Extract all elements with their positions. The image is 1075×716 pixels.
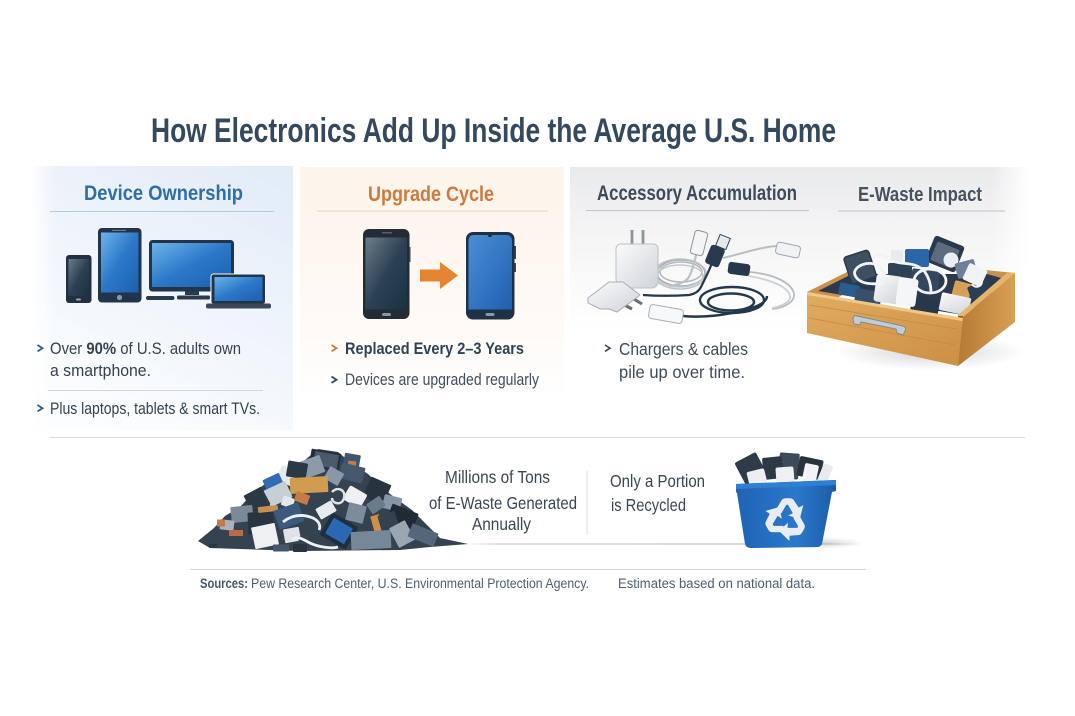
panel: upgrade cycle bbox=[300, 167, 564, 400]
text: millions of tons: Annually bbox=[472, 514, 531, 534]
text: replacement cycle: Replaced Every 2–3 Years bbox=[345, 339, 524, 358]
title: How Electronics Add Up Inside the Average U.S. Home bbox=[151, 112, 836, 150]
text: only a portion recycled: is Recycled bbox=[611, 495, 686, 515]
icon: upgrade arrow bbox=[420, 262, 458, 289]
bin contents bbox=[734, 452, 833, 488]
illustration: e-waste pile bbox=[198, 449, 468, 552]
icon: flat charger bbox=[588, 282, 642, 312]
icon: recycling bin bbox=[734, 452, 864, 549]
icon: small phone bbox=[66, 255, 92, 303]
heading: upgrade cycle: Upgrade Cycle bbox=[368, 183, 494, 206]
drawer front bbox=[807, 292, 963, 366]
text: regular upgrades: Devices are upgraded regularly bbox=[345, 371, 540, 389]
text: only a portion recycled bbox=[610, 471, 705, 515]
text: other devices: Plus laptops, tablets & smart TVs. bbox=[50, 399, 260, 418]
text: only a portion recycled: Only a Portion bbox=[610, 471, 705, 491]
icon: monitor bbox=[146, 240, 234, 300]
text: sources bbox=[200, 576, 815, 591]
icon: usb connectors bbox=[648, 230, 801, 324]
text: millions of tons: Millions of Tons bbox=[445, 467, 550, 487]
bottom ground line bbox=[460, 543, 860, 545]
text: chargers pile up bbox=[605, 339, 748, 382]
recycling symbol bbox=[759, 498, 810, 544]
panel: accessories and e-waste bbox=[570, 167, 1030, 400]
heading: e-waste impact: E-Waste Impact bbox=[858, 184, 982, 206]
drawer right side bbox=[958, 273, 1015, 366]
text: sources: Estimates based on national data. bbox=[618, 576, 815, 591]
icon: new phone bbox=[466, 232, 516, 320]
icon: tablet bbox=[98, 228, 142, 302]
icon: chargers and cables bbox=[588, 230, 801, 324]
text: millions of tons: of E-Waste Generated bbox=[429, 493, 577, 513]
text: millions of tons bbox=[429, 467, 577, 534]
text: smartphone stat: Over 90% of U.S. adults own bbox=[50, 339, 241, 358]
heading: device ownership: Device Ownership bbox=[84, 182, 243, 205]
icon: old phone bbox=[363, 229, 410, 319]
drawer contents bbox=[838, 235, 995, 316]
icon: drawer full of electronics bbox=[807, 235, 1025, 370]
icon: charger cube bbox=[616, 230, 658, 288]
heading: accessory accumulation: Accessory Accumulation bbox=[597, 182, 797, 205]
drawer handle bbox=[853, 316, 906, 335]
text: chargers pile up: Chargers & cables bbox=[619, 339, 748, 359]
text: smartphone stat bbox=[38, 339, 241, 380]
text: chargers pile up: pile up over time. bbox=[619, 362, 745, 382]
drawer interior bbox=[818, 274, 1005, 315]
text: sources: Pew Research Center, U.S. Environmental Protection Agency. bbox=[251, 576, 589, 591]
text: smartphone stat: a smartphone. bbox=[50, 361, 151, 380]
text: sources: Sources: bbox=[200, 576, 248, 591]
icon: devices bbox=[66, 228, 271, 308]
panel: device ownership bbox=[30, 166, 293, 430]
drawer back rim bbox=[807, 272, 877, 298]
icon: laptop bbox=[206, 274, 271, 308]
